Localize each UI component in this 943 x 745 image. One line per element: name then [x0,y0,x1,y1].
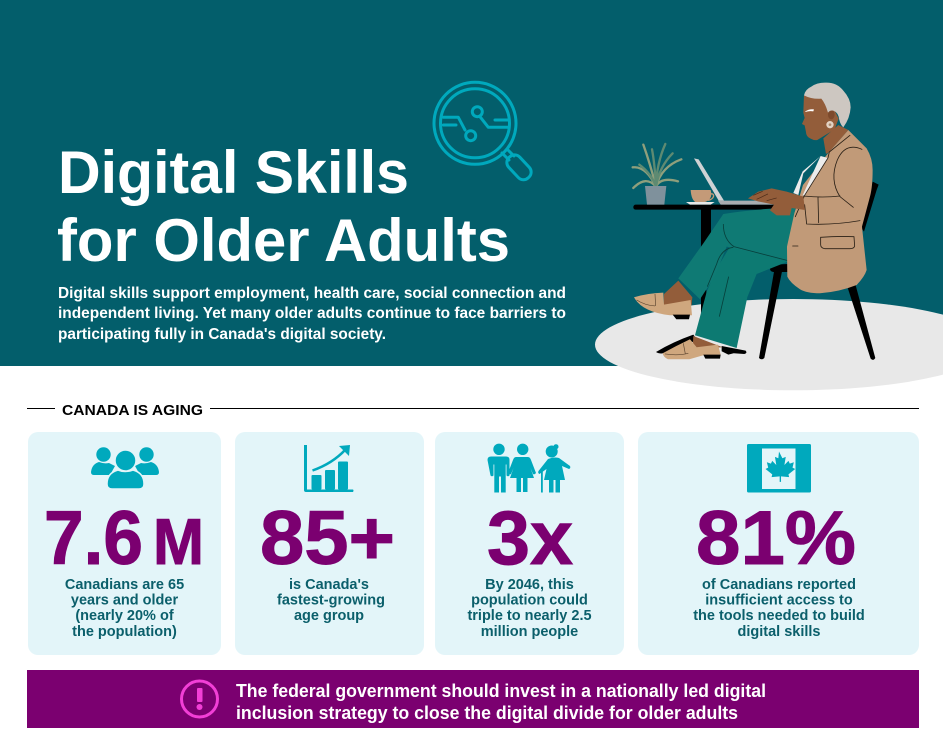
statistic: 85+ [260,496,395,581]
back ankle skin [664,281,692,306]
floor ellipse [595,299,943,390]
description: (nearly 20% of [75,608,174,624]
callout text: The federal government should invest in a nationally led digital [236,681,766,701]
statistic: M [153,505,204,578]
callout text [236,681,766,723]
trouser seams [707,224,788,317]
description: digital skills [738,624,820,640]
description [693,577,865,640]
front shoe [663,339,721,359]
description: By 2046, this [485,577,574,593]
description: insufficient access to [705,592,853,608]
panel: 3x [435,432,624,655]
callout text: inclusion strategy to close the digital divide for older adults [236,703,738,723]
blouse [793,156,821,195]
description [277,577,385,624]
title [57,139,510,274]
icon: three figures [488,444,570,492]
statistic [44,496,204,581]
statistic: 7.6 [44,496,143,581]
back shoe [634,293,692,319]
statistic: 81% [696,496,856,581]
title: for Older Adults [57,207,510,274]
statistic: 3x [487,496,573,581]
description: is Canada's [289,577,369,593]
neck [823,125,848,154]
hand and arm [748,188,805,215]
face [802,95,839,140]
description: age group [294,608,364,624]
description: of Canadians reported [702,577,856,593]
panel: 81% [638,432,919,655]
icon: growth chart [304,445,354,492]
panel: 7.6 M [28,432,221,655]
description: years and older [71,592,178,608]
table [633,205,776,355]
blazer [787,130,873,293]
coffee cup [686,190,715,205]
intro text: independent living. Yet many older adults continue to face barriers to [58,305,566,322]
eyebrow [805,109,814,112]
laptop [694,158,775,205]
header background [0,0,943,366]
description: fastest-growing [277,592,385,608]
intro text [58,285,566,343]
intro text: participating fully in Canada's digital society. [58,326,386,343]
description: million people [481,624,578,640]
section heading: CANADA IS AGING [62,403,203,419]
description: triple to nearly 2.5 [467,608,592,624]
callout banner [27,670,919,728]
finger lines [753,191,777,201]
intro text: Digital skills support employment, health care, social connection and [58,285,566,302]
description: population could [471,592,588,608]
ear and earring [826,110,835,128]
illustration: woman working on a laptop [595,83,943,390]
plant [633,144,681,205]
description: the population) [72,624,177,640]
description [467,577,592,640]
front ankle skin [693,336,723,349]
upper trouser leg [678,207,795,299]
lower trouser leg [695,247,788,348]
icon: magnifying glass with circuit [434,82,534,183]
description: Canadians are 65 [65,577,184,593]
title: Digital Skills [58,139,409,206]
hair [804,83,851,127]
icon: group of people [91,447,159,489]
chair [759,182,879,360]
description: the tools needed to build [693,608,865,624]
description [65,577,184,640]
panel: 85+ [235,432,424,655]
icon: exclamation mark [182,681,218,717]
icon: Canadian flag [747,444,811,492]
